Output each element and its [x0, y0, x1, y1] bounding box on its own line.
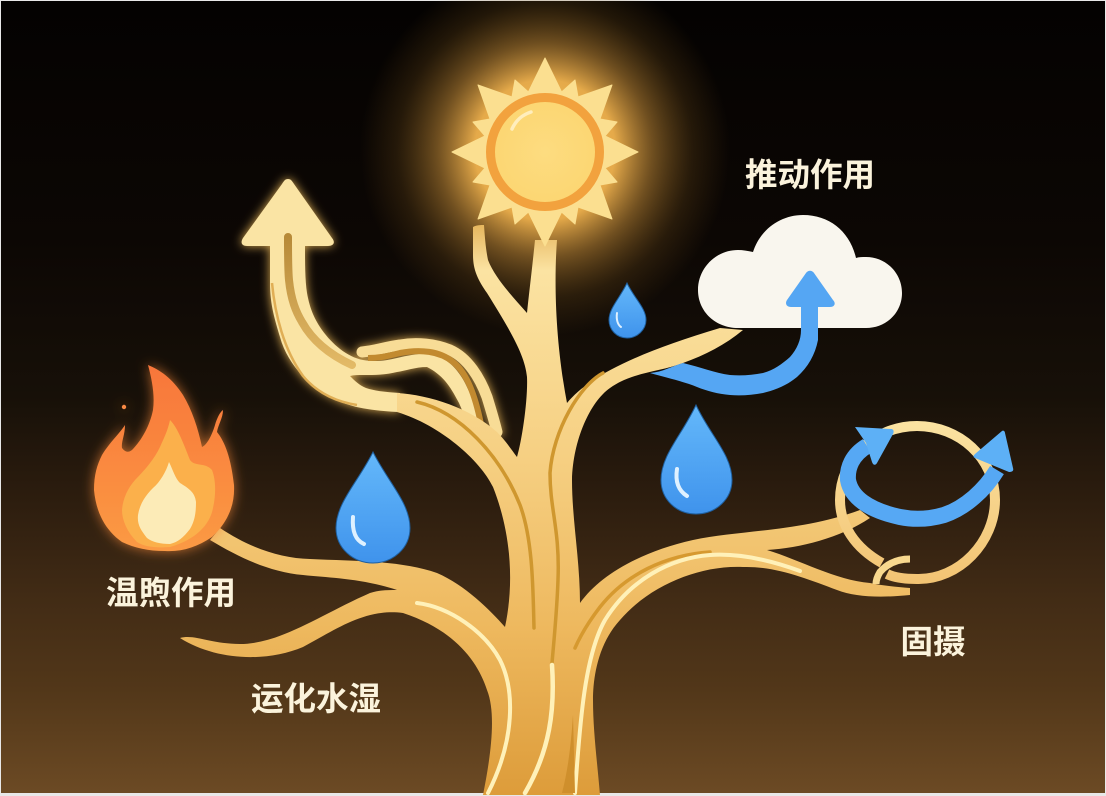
bright line: left root: [417, 603, 510, 793]
arrow outer edge line: [272, 283, 357, 405]
bright line: centre root: [525, 665, 553, 793]
trunk inner lines: [417, 373, 800, 793]
inner flame: [138, 462, 196, 544]
sun rays: [452, 58, 638, 246]
blue arrow into the cloud: [650, 271, 835, 395]
arrowhead left: [855, 427, 894, 465]
arrow head and strands: [242, 179, 478, 424]
loop band: [848, 446, 997, 519]
label: 固摄: 固摄: [900, 624, 966, 660]
outer flame: [94, 365, 234, 551]
bright line: right root: [575, 555, 800, 793]
label: 运化水湿: 运化水湿: [251, 681, 381, 717]
blue loop arrows: [848, 427, 1013, 519]
label: 温煦作用: 温煦作用: [106, 575, 236, 611]
loop ring: [840, 426, 995, 584]
arrow branch: upward arrow with double strand: [242, 179, 497, 432]
dark line: left branch into trunk: [417, 402, 534, 628]
sun disc: [490, 98, 600, 206]
ring: [840, 426, 995, 579]
water drop: left: [336, 452, 410, 563]
flame: [94, 365, 234, 551]
sun highlight: [512, 112, 531, 129]
sun halo: [360, 0, 730, 335]
dark line: right branch into trunk: [550, 373, 603, 663]
middle flame: [122, 420, 215, 547]
S band dark line: [368, 351, 481, 424]
label: 推动作用: 推动作用: [745, 157, 875, 193]
water drop: middle: [661, 405, 732, 514]
tree trunk and branches: [180, 225, 910, 795]
water drop: top: [609, 283, 646, 338]
arrow strand centre band: [288, 237, 352, 365]
dark line: lower right branch: [575, 552, 710, 648]
wedge: right root shadow: [562, 715, 575, 793]
cloud: [698, 215, 902, 328]
upper S band: [362, 344, 497, 432]
spark: [122, 405, 126, 409]
knot: [876, 559, 910, 584]
sun: [452, 58, 638, 246]
arrowhead right: [974, 431, 1013, 472]
